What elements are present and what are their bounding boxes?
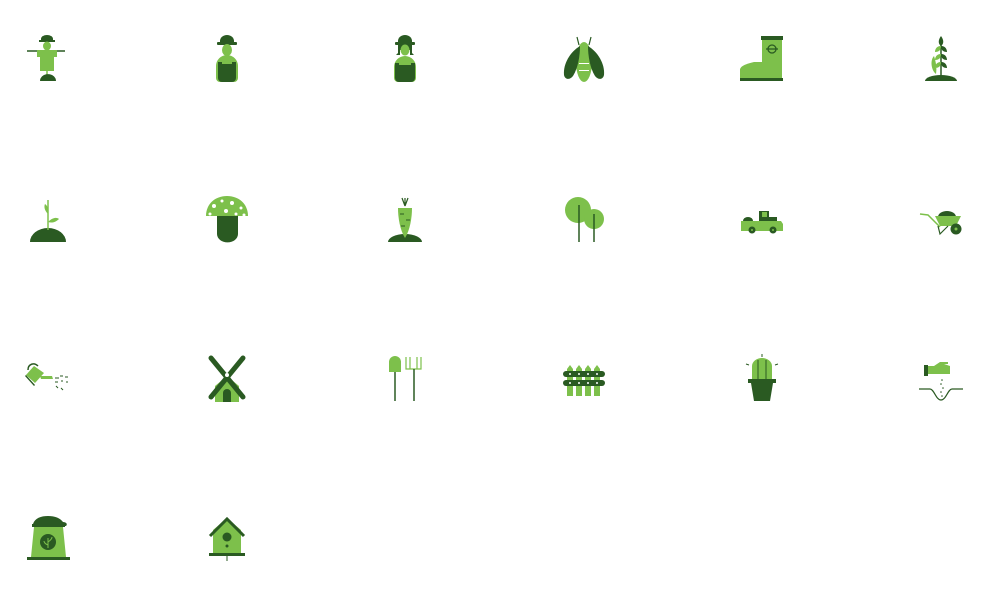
icon: hand sowing seeds	[919, 362, 963, 400]
icon: scarecrow	[27, 35, 65, 81]
icon: mushroom	[206, 196, 248, 242]
icon: truck	[741, 211, 783, 234]
icon: fence	[563, 365, 605, 396]
icon: carrot	[388, 198, 422, 242]
icon: trees	[565, 197, 604, 242]
icon: wheat	[925, 36, 957, 81]
icon: birdhouse	[209, 518, 245, 561]
icon: boot	[740, 36, 783, 81]
icon: shovel and fork	[389, 356, 421, 401]
icon: bee	[564, 37, 604, 82]
icon: sprout	[30, 197, 66, 242]
icon: farmer woman	[394, 35, 416, 82]
icon: windmill	[211, 358, 243, 402]
icon: wheelbarrow	[920, 211, 962, 234]
icon: cactus	[746, 354, 778, 401]
icon: farmer	[216, 35, 238, 82]
icon: watering can	[25, 364, 68, 390]
icon: soil sack	[27, 516, 70, 560]
